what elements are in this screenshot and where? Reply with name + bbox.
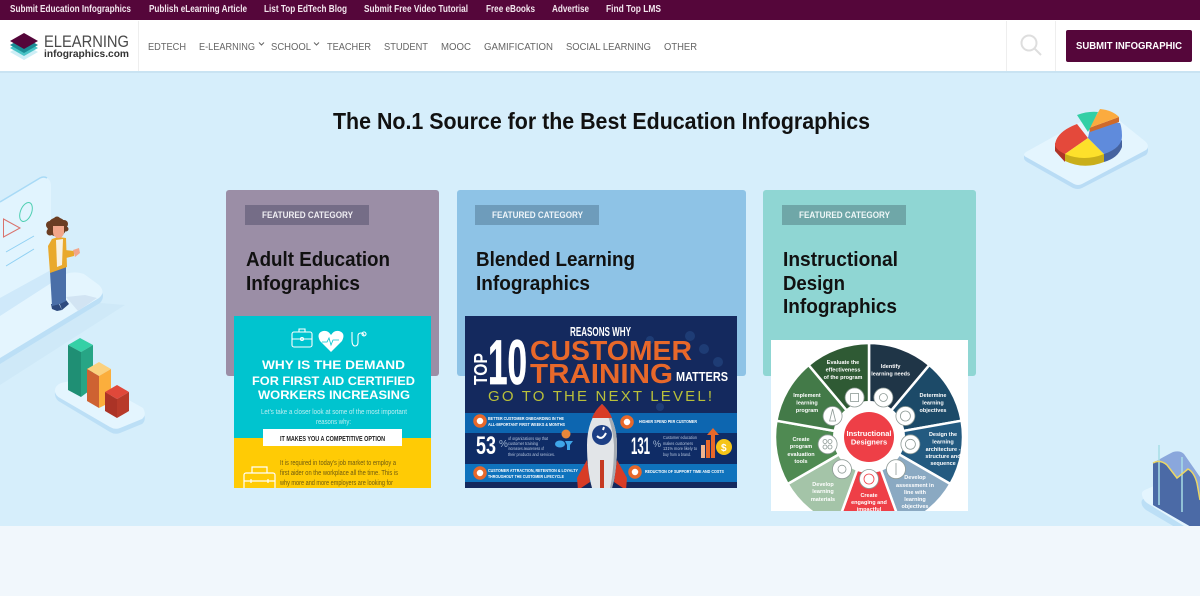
step labels: Identify — [881, 364, 901, 370]
illustration: 3D pie chart — [1024, 109, 1148, 189]
step labels: program — [796, 408, 818, 414]
top utility bar: Submit Free Video Tutorial — [364, 4, 468, 15]
infographic thumbnail: instructional designers wheel — [771, 340, 968, 511]
step labels: evaluation — [787, 452, 815, 458]
card heading — [246, 249, 390, 295]
step labels: tools — [794, 459, 808, 465]
statistics: makes customers — [663, 441, 694, 446]
step labels: Implement — [793, 393, 821, 399]
section markers and labels: ALL-IMPORTANT FIRST WEEKS & MONTHS — [488, 422, 565, 427]
icon: people — [555, 430, 573, 450]
thumbnail headline: TOP — [471, 353, 491, 385]
button: submit infographic: SUBMIT INFOGRAPHIC — [1076, 40, 1182, 52]
thumbnail title: FOR FIRST AID CERTIFIED — [252, 374, 415, 388]
thumbnail body text: It is required in today's job market to employ a — [280, 460, 396, 467]
main navigation bar: OTHER — [664, 41, 697, 53]
hero background — [0, 71, 1200, 526]
card heading: Infographics — [783, 296, 897, 318]
main navigation bar: GAMIFICATION — [484, 41, 553, 53]
logo — [10, 32, 129, 60]
centre circle — [844, 412, 894, 462]
step labels: impactful — [857, 507, 882, 513]
step labels: Develop — [904, 475, 926, 481]
step labels: objectives — [902, 504, 928, 510]
icon: search — [1022, 36, 1041, 55]
top utility bar: Submit Education Infographics — [10, 4, 131, 15]
logo: ELEARNING — [44, 32, 129, 51]
category tag: FEATURED CATEGORY — [262, 210, 353, 220]
step labels: program — [790, 444, 812, 450]
thumbnail label box — [263, 429, 402, 446]
card heading: Infographics — [246, 273, 360, 295]
step labels: objectives — [920, 408, 946, 414]
top utility bar: List Top EdTech Blog — [264, 4, 347, 15]
main navigation bar: STUDENT — [384, 41, 429, 53]
step labels: learning — [922, 400, 944, 406]
step labels: learning — [904, 497, 926, 503]
section markers and labels — [475, 416, 724, 479]
top utility bar: Publish eLearning Article — [149, 4, 247, 15]
infographic thumbnail: customer training — [465, 316, 737, 490]
step labels: Evaluate the — [827, 360, 859, 366]
thumbnail headline: TRAINING — [530, 358, 673, 389]
top utility bar: Find Top LMS — [606, 4, 661, 15]
thumbnail headline: CUSTOMER — [530, 335, 692, 366]
step labels: Determine — [920, 393, 946, 399]
statistics: % — [499, 439, 508, 450]
category tag: FEATURED CATEGORY — [492, 210, 583, 220]
icon: growth bars and coin: $ — [721, 443, 727, 454]
section markers and labels: REDUCTION OF SUPPORT TIME AND COSTS — [645, 469, 724, 474]
thumbnail body text: first aider on the workplace all the time. This is — [280, 470, 398, 477]
step labels: learning — [932, 440, 954, 446]
category tag — [475, 205, 599, 225]
infographic thumbnail: first aid — [234, 316, 431, 493]
panel: blended learning category card — [457, 190, 746, 376]
thumbnail headline — [471, 324, 728, 405]
thumbnail headline: REASONS WHY — [570, 324, 631, 339]
illustration: line chart corner — [1142, 445, 1200, 532]
panel: instructional design category card — [763, 190, 976, 376]
statistics: Customer education — [663, 435, 697, 440]
step labels: Create — [792, 437, 810, 443]
thumbnail body text — [279, 460, 398, 487]
statistics: buy from a brand. — [663, 452, 691, 457]
top utility bar — [0, 0, 1200, 20]
icon: medical symbols — [292, 329, 366, 352]
section markers and labels: HIGHER SPEND PER CUSTOMER — [639, 419, 698, 424]
thumbnail title — [252, 360, 414, 399]
icon: growth bars and coin — [701, 428, 732, 458]
card heading: Adult Education — [246, 249, 390, 271]
icon: briefcase — [244, 467, 275, 493]
step labels: line with — [904, 490, 927, 496]
statistics: increases awareness of — [508, 446, 545, 451]
main navigation bar: SCHOOL — [271, 41, 311, 53]
section markers and labels: BETTER CUSTOMER ONBOARDING IN THE — [488, 416, 564, 421]
top utility bar: Free eBooks — [486, 4, 535, 15]
top utility bar: Advertise — [552, 4, 589, 15]
main navigation bar: TEACHER — [327, 41, 371, 53]
step labels: of the program — [824, 375, 863, 381]
statistics: customer training — [508, 441, 538, 446]
thumbnail title: WORKERS INCREASING — [258, 388, 410, 402]
main navigation bar — [0, 20, 1200, 73]
card heading — [476, 249, 635, 295]
main navigation bar: E-LEARNING — [199, 41, 255, 53]
main navigation bar: MOOC — [441, 41, 471, 53]
statistics: 131 — [631, 433, 650, 460]
thumbnail headline: GO TO THE NEXT LEVEL! — [488, 388, 712, 405]
step labels: structure and — [925, 454, 961, 460]
icon: rocket — [577, 404, 627, 490]
category tag — [782, 205, 906, 225]
illustration: person at whiteboard — [0, 176, 103, 364]
illustration: 3D bar chart — [55, 338, 145, 434]
step labels: materials — [811, 497, 835, 503]
step labels: Develop — [812, 482, 834, 488]
statistics: 53 — [476, 432, 496, 460]
thumbnail label box: IT MAKES YOU A COMPETITIVE OPTION — [280, 434, 385, 443]
statistics: % — [653, 439, 661, 449]
statistics: of organizations say that — [508, 436, 549, 441]
panel: adult education category card — [226, 190, 439, 376]
section markers and labels: CUSTOMER ATTRACTION, RETENTION & LOYALTY — [488, 468, 578, 473]
thumbnail title: WHY IS THE DEMAND — [262, 358, 405, 372]
main navigation bar: EDTECH — [148, 41, 186, 53]
card heading — [783, 249, 898, 318]
logo: infographics.com — [44, 48, 129, 60]
category tag — [245, 205, 369, 225]
step labels: assessment in — [896, 483, 935, 489]
thumbnail headline: MATTERS — [676, 369, 728, 384]
wheel segments — [776, 344, 962, 511]
card heading: Infographics — [476, 273, 590, 295]
step labels: Create — [860, 493, 878, 499]
thumbnail headline: 10 — [488, 328, 527, 398]
step labels: architecture - — [926, 447, 961, 453]
centre circle: Designers — [851, 438, 887, 446]
statistics — [476, 436, 697, 457]
main navigation bar: SOCIAL LEARNING — [566, 41, 651, 53]
statistics: their products and services. — [508, 452, 555, 457]
thumbnail body text: why more and more employers are looking for — [279, 480, 394, 487]
card heading: Instructional — [783, 249, 898, 271]
section markers and labels: THROUGHOUT THE CUSTOMER LIFECYCLE — [488, 474, 564, 479]
title: The No.1 Source for the Best Education Infographics — [333, 108, 870, 134]
button: submit infographic — [1066, 30, 1192, 62]
step labels: effectiveness — [826, 368, 860, 374]
step labels: Design the — [929, 432, 957, 438]
card heading: Blended Learning — [476, 249, 635, 271]
step labels: sequence — [930, 461, 956, 467]
step labels: learning — [796, 400, 818, 406]
card heading: Design — [783, 273, 845, 295]
thumbnail intro text — [261, 409, 407, 426]
thumbnail intro text: reasons why: — [316, 419, 351, 426]
centre circle: Instructional — [846, 429, 892, 438]
category tag: FEATURED CATEGORY — [799, 210, 890, 220]
person — [46, 216, 80, 311]
thumbnail intro text: Let's take a closer look at some of the most important — [261, 409, 407, 416]
step labels: learning — [812, 489, 834, 495]
step icons — [818, 388, 920, 488]
statistics: 131% more likely to — [663, 446, 697, 451]
step labels: learning needs — [871, 372, 910, 378]
step labels: engaging and — [851, 500, 887, 506]
step labels — [787, 360, 961, 513]
